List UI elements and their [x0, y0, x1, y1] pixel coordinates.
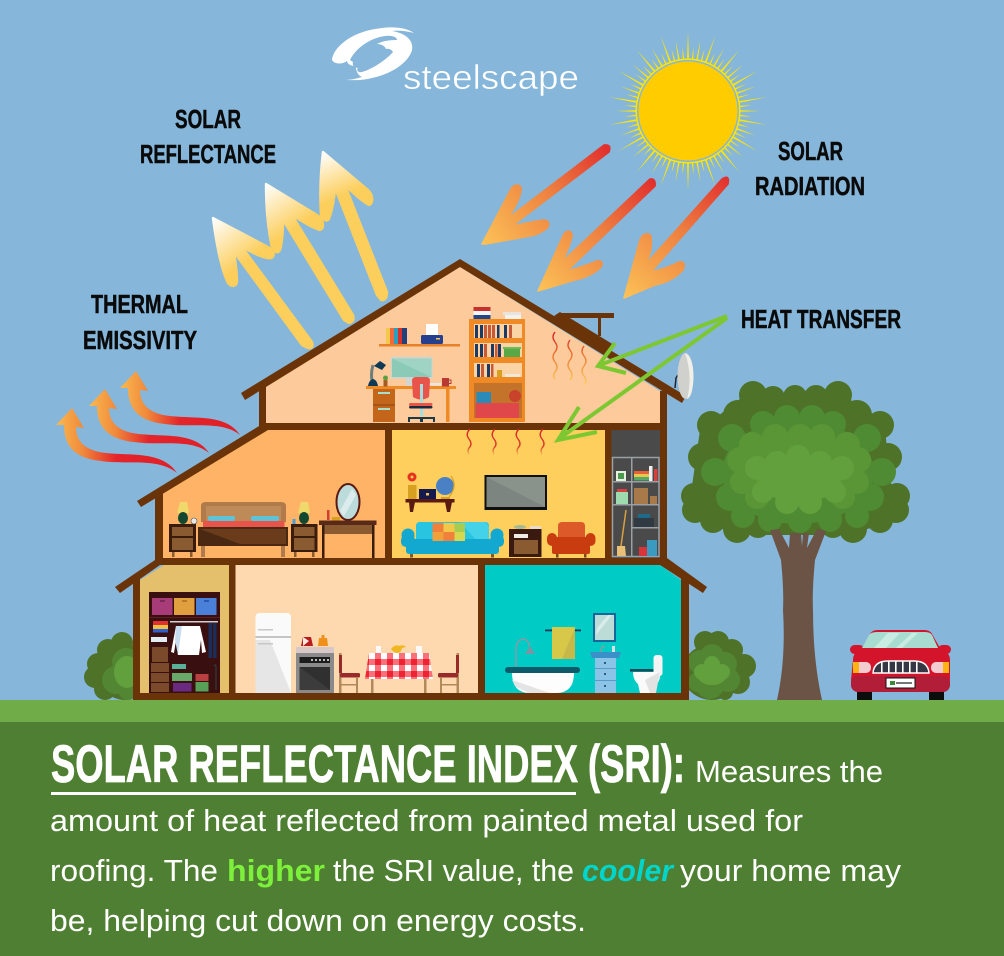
towel on rod — [545, 627, 581, 659]
bush: left — [84, 632, 153, 700]
label: solar reflectance: REFLECTANCE — [140, 139, 276, 169]
ground strip — [0, 700, 1004, 722]
heading: solar reflectance index: SOLAR REFLECTANCE INDEX (SRI): — [51, 735, 685, 794]
bed — [198, 502, 288, 557]
middle left room: bedroom — [163, 430, 385, 558]
arrows: heat transfer — [558, 316, 727, 440]
office chair — [408, 377, 435, 422]
arrows: thermal emissivity — [56, 371, 240, 473]
icon: satellite dish — [675, 353, 694, 399]
label: heat transfer: HEAT TRANSFER — [741, 304, 901, 334]
living room furniture — [401, 472, 596, 558]
dining table with checked tablecloth — [365, 645, 433, 693]
arrows: solar radiation — [482, 145, 728, 298]
body text: amount of heat reflected from painted metal used for — [50, 803, 803, 838]
wardrobe — [149, 592, 220, 693]
body text: be, helping cut down on energy costs. — [50, 903, 586, 938]
bathroom — [505, 613, 662, 693]
hanging clothes — [170, 621, 218, 658]
icon: sun — [606, 30, 770, 192]
storage boxes — [152, 598, 216, 615]
label: solar reflectance — [140, 104, 276, 169]
folded clothes — [151, 621, 168, 642]
nightstand left with lamp — [169, 502, 197, 557]
label: thermal emissivity: THERMAL — [91, 289, 188, 319]
stove with oven — [296, 647, 334, 693]
computer monitor — [391, 357, 441, 386]
bush: right — [682, 631, 756, 700]
body text: roofing. The — [50, 853, 218, 888]
grille — [873, 661, 929, 673]
closet room — [611, 430, 660, 558]
wall shelf with binders and printer — [379, 324, 460, 346]
mirrors — [850, 645, 951, 654]
desk — [366, 386, 456, 422]
left dining chair — [339, 653, 360, 693]
kettle and pot — [301, 635, 328, 646]
dresser with oval mirror — [319, 484, 376, 558]
bookcase — [469, 307, 525, 422]
house — [115, 259, 707, 700]
windshield — [862, 632, 938, 648]
middle room: living room — [392, 430, 606, 558]
attic room — [266, 267, 660, 423]
bedroom furniture — [169, 484, 376, 558]
wall mirror — [593, 613, 616, 642]
body text: the SRI value, the — [333, 853, 574, 888]
nightstand right with lamp — [291, 502, 318, 557]
panel: solar reflectance index — [0, 722, 1004, 956]
television — [484, 475, 547, 510]
heat waves: living room — [467, 429, 544, 454]
refrigerator — [256, 613, 291, 693]
sofa — [401, 522, 504, 558]
wheels — [857, 690, 944, 700]
plant and mug — [383, 376, 451, 386]
side table — [509, 525, 542, 557]
label: solar reflectance: SOLAR — [175, 104, 241, 134]
armchair — [547, 522, 596, 558]
license plate — [886, 678, 915, 688]
heading underline — [51, 792, 576, 795]
car — [850, 630, 951, 700]
body text: higher — [227, 853, 325, 888]
sink cabinet — [590, 646, 621, 693]
drawers — [151, 647, 169, 692]
body text: your home may — [680, 853, 902, 888]
heat waves: attic — [553, 332, 586, 385]
storage closet shelves — [612, 457, 659, 557]
body text: cooler — [582, 853, 675, 888]
label: thermal emissivity: EMISSIVITY — [83, 325, 197, 355]
kitchen — [256, 613, 459, 693]
foliage: mid layer — [701, 405, 896, 533]
foliage: light layer — [745, 445, 854, 514]
house framing — [115, 259, 707, 700]
label: solar radiation: SOLAR — [778, 136, 843, 166]
desk lamp — [368, 361, 386, 386]
logo: steelscape: steelscape — [403, 59, 579, 97]
body text: Measures the — [695, 754, 883, 789]
roof vent — [554, 312, 614, 353]
ground: walk-in wardrobe room — [140, 565, 229, 693]
foliage: lighter layer — [727, 424, 871, 509]
headlights — [853, 662, 949, 673]
right dining chair — [438, 653, 459, 693]
label: thermal emissivity — [83, 289, 197, 355]
arrows: solar reflectance — [213, 152, 387, 348]
foliage: dark layer — [681, 381, 910, 543]
attic furniture — [366, 307, 525, 422]
label: solar radiation — [755, 136, 865, 201]
trunk — [770, 529, 826, 700]
label: solar radiation: RADIATION — [755, 171, 865, 201]
car body — [851, 630, 950, 692]
body text — [50, 754, 902, 938]
wall shelf with vase, laptop, globe — [406, 472, 454, 512]
bathtub with shower — [505, 639, 580, 693]
toilet — [630, 655, 662, 693]
lower shelf items — [172, 664, 216, 692]
ground: kitchen room — [235, 565, 478, 693]
sky background — [0, 0, 1004, 700]
tree — [681, 381, 910, 700]
ground: bathroom — [485, 565, 681, 693]
logo: steelscape — [332, 27, 579, 97]
